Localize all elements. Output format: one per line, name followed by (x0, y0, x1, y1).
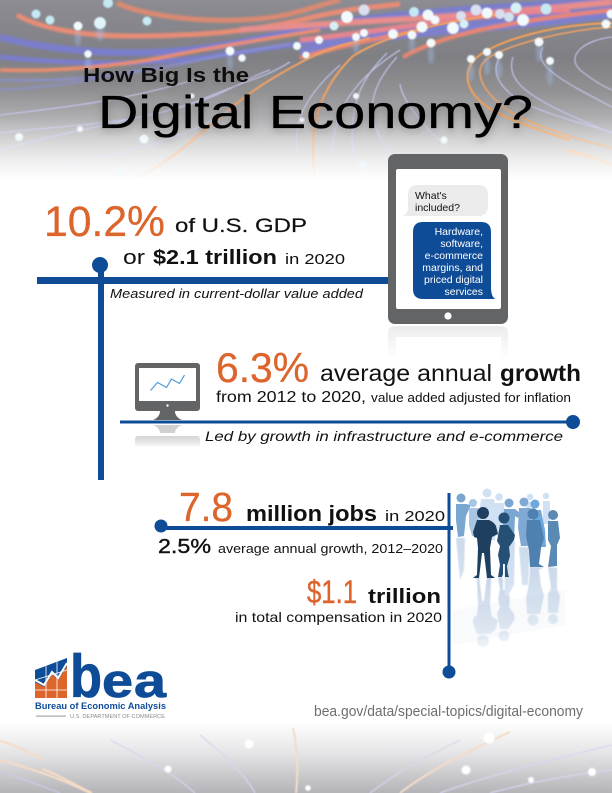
logo agency name: Bureau of Economic Analysis (35, 701, 166, 712)
chat bubble: answer: services (444, 286, 483, 298)
average annual growth 2012-2020: average annual growth, 2012–2020 (218, 541, 443, 556)
in 2020: in 2020 (385, 508, 445, 525)
background: fibre optic top band (0, 0, 612, 192)
icon: monitor reflection (135, 425, 200, 446)
or: or (123, 247, 145, 269)
2.5%: 2.5% (158, 536, 211, 558)
logo wordmark: e (102, 654, 133, 707)
figure 7.8: 7.8 (179, 484, 233, 530)
chat bubble: answer: margins, and (422, 262, 483, 274)
people: middle row (456, 494, 546, 547)
icon: desktop monitor (135, 363, 200, 420)
value added adjusted for inflation: value added adjusted for inflation (371, 390, 571, 405)
timeline: main left blue lines (37, 257, 388, 480)
chat bubble: question: What's (415, 190, 447, 202)
average annual: average annual (320, 360, 492, 386)
icon: tablet with chat (388, 154, 508, 324)
background: glowing dots (15, 0, 612, 176)
in total compensation: in total compensation in 2020 (235, 609, 442, 625)
of U.S. GDP: of U.S. GDP (175, 215, 307, 237)
title line 1: How Big Is the (83, 64, 249, 87)
figure 10.2%: 10.2% (44, 198, 165, 246)
note: measured in current-dollar value added: Measured in current-dollar value added (110, 287, 364, 301)
source url: bea.gov/data/special-topics/digital-economy (314, 704, 584, 720)
stat: 6.3% growth (205, 344, 581, 444)
people: right figures (526, 508, 560, 567)
icon: tablet reflection (388, 326, 508, 361)
million jobs: million jobs (246, 501, 377, 526)
$2.1 trillion: $2.1 trillion (153, 247, 277, 269)
stat: 7.8 million jobs (158, 484, 445, 558)
note: led by growth: Led by growth in infrastructure and e-commerce (205, 428, 563, 444)
chat bubble: answer: Hardware, (435, 226, 483, 238)
background: fibre optic bottom band (0, 722, 612, 793)
logo mark grid (35, 658, 67, 698)
icon: group of people (453, 488, 565, 647)
figure 6.3%: 6.3% (216, 344, 309, 391)
timeline: second blue line (120, 415, 580, 429)
timeline: third blue lines (154, 493, 456, 678)
logo department line (36, 716, 66, 717)
people: back row light (479, 488, 550, 540)
stat: $1.1 trillion (235, 574, 442, 625)
title line 2: Digital Economy? (98, 86, 533, 138)
logo wordmark: a (134, 654, 167, 707)
logo department name: U.S. DEPARTMENT OF COMMERCE (70, 714, 165, 720)
chat bubble: answer (413, 222, 495, 299)
logo wordmark: b (70, 643, 102, 710)
stat: 10.2% of GDP (44, 198, 364, 301)
chat bubble: question (403, 185, 488, 216)
people: front man (473, 507, 498, 578)
in 2020: in 2020 (285, 251, 345, 268)
chat bubble: question: included? (415, 202, 460, 214)
chat bubble: answer: priced digital (424, 274, 483, 286)
logo wordmark (70, 643, 167, 710)
growth: growth (500, 360, 581, 386)
trillion: trillion (368, 585, 441, 608)
people: reflections (456, 538, 560, 647)
people: front woman (497, 512, 515, 577)
background: dot glow streaks (75, 25, 553, 85)
chat bubble: answer: software, (440, 238, 483, 250)
title (83, 64, 533, 138)
figure $1.1: $1.1 (307, 574, 357, 610)
chat bubble: answer: e-commerce (425, 250, 483, 262)
people: floor shading (453, 590, 565, 645)
from 2012 to 2020: from 2012 to 2020, (216, 389, 366, 406)
logo: bea (35, 643, 167, 720)
